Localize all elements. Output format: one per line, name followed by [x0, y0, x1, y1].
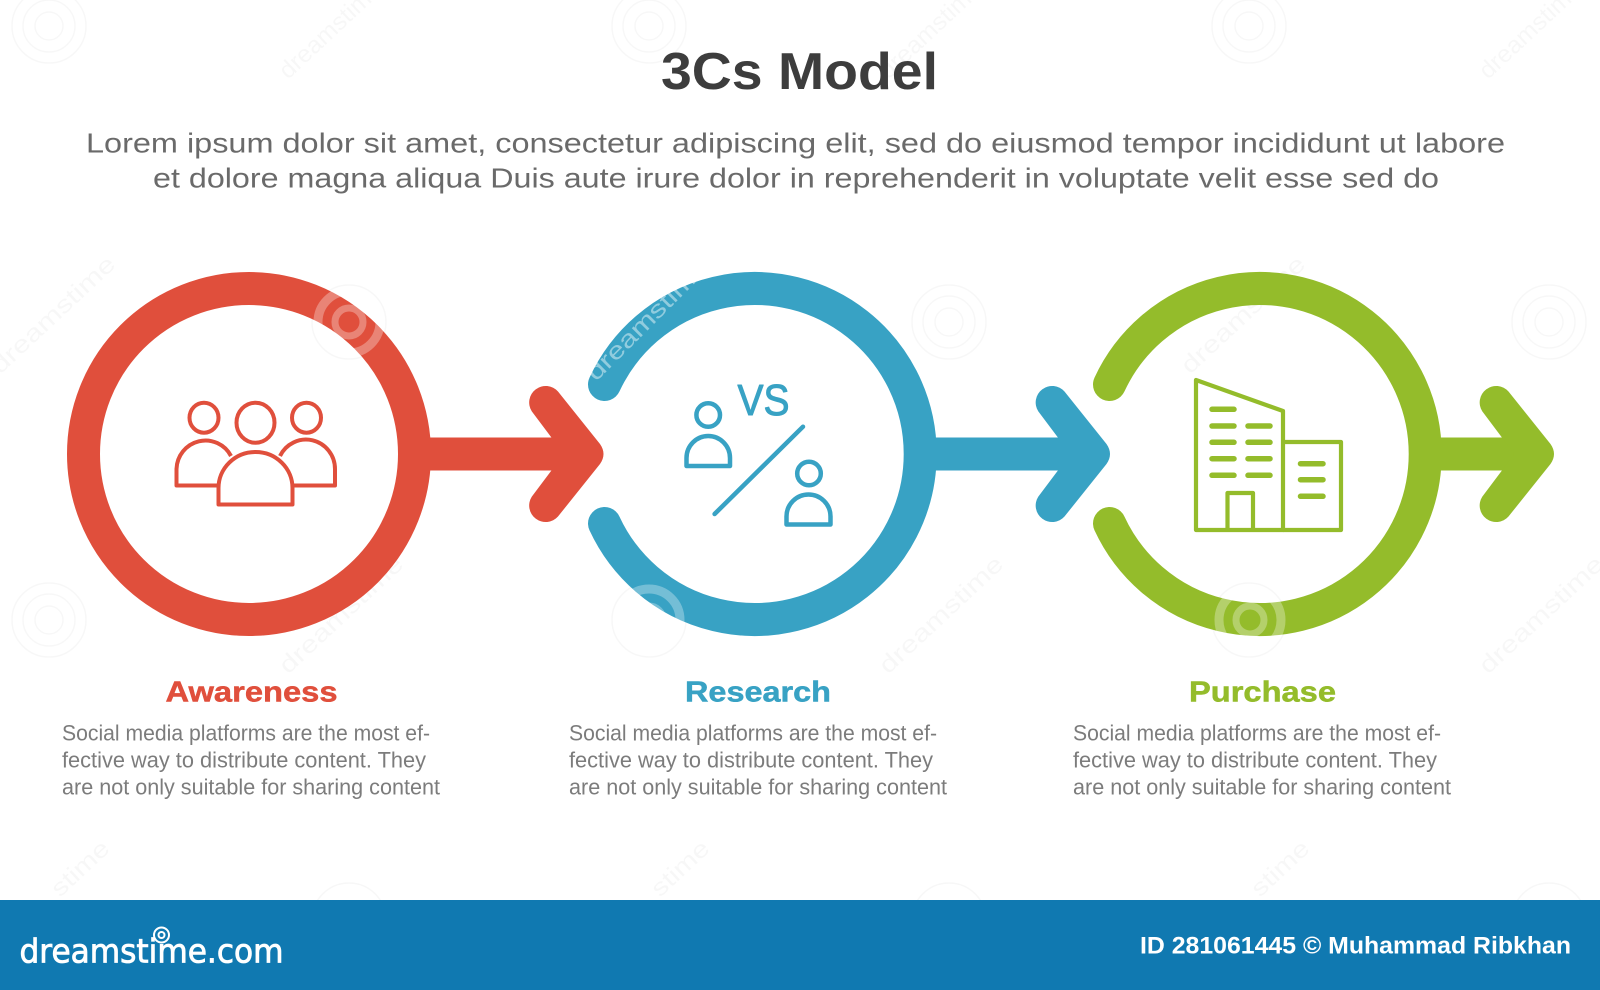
- text block: research: Social media platforms are the most ef-: [569, 721, 937, 746]
- text block: purchase: fective way to distribute content. They: [1073, 748, 1437, 773]
- ring: research: [604, 289, 920, 620]
- watermark layer: dreamstime: [1176, 251, 1311, 379]
- text block: awareness: Social media platforms are the most ef-: [62, 721, 430, 746]
- ring: awareness: [84, 288, 414, 620]
- arrow: awareness to research: [425, 386, 604, 522]
- subtitle: Lorem ipsum dolor sit amet, consectetur adipiscing elit, sed do eiusmod tempor incididunt ut labore: [86, 128, 1505, 158]
- text block: purchase: Social media platforms are the most ef-: [1073, 721, 1441, 746]
- watermark layer: stime: [646, 835, 715, 902]
- watermark layer: dreamstime: [274, 551, 409, 679]
- subtitle: et dolore magna aliqua Duis aute irure dolor in reprehenderit in voluptate velit esse sed do: [153, 162, 1439, 194]
- footer bar: [0, 900, 1600, 990]
- text block: awareness: fective way to distribute content. They: [62, 748, 426, 773]
- column: awareness: [62, 676, 440, 800]
- text block: research: are not only suitable for sharing content: [569, 775, 947, 800]
- step 1: awareness circle with arrow: [84, 288, 604, 620]
- text block: research: [569, 721, 947, 800]
- subtitle: [86, 128, 1505, 194]
- watermark overlay on rings: [318, 254, 1281, 651]
- watermark layer: stime: [1246, 835, 1315, 902]
- heading: awareness: Awareness: [166, 676, 338, 708]
- icon: group of people: [176, 403, 335, 504]
- column: research: [569, 676, 947, 800]
- footer credit: ID 281061445 © Muhammad Ribkhan: [1140, 932, 1571, 960]
- text block: research: fective way to distribute content. They: [569, 748, 933, 773]
- step 3: purchase circle with arrow: [1110, 289, 1554, 620]
- icon: person versus person: VS: [738, 376, 790, 425]
- text block: awareness: are not only suitable for sharing content: [62, 775, 440, 800]
- step 2: research circle with arrow: [604, 289, 1110, 620]
- watermark layer: dreamstime: [1474, 551, 1600, 679]
- column: purchase: [1073, 676, 1451, 800]
- arrow: purchase outward: [1438, 386, 1554, 522]
- watermark layer: dreamstime: [874, 551, 1009, 679]
- watermark layer: stime: [46, 835, 115, 902]
- text block: awareness: [62, 721, 440, 800]
- icon: logo swirl: [154, 928, 169, 942]
- watermark overlay on rings: dreamstime: [581, 254, 713, 386]
- title: 3Cs Model: [661, 43, 938, 101]
- text block: purchase: [1073, 721, 1451, 800]
- heading: research: Research: [685, 676, 831, 708]
- icon: person versus person: [686, 376, 830, 524]
- icon: office buildings: [1196, 380, 1341, 530]
- ring: purchase: [1110, 289, 1425, 620]
- heading: purchase: Purchase: [1189, 676, 1336, 708]
- text block: purchase: are not only suitable for sharing content: [1073, 775, 1451, 800]
- footer logo: dreamstime.com: [20, 932, 284, 970]
- arrow: research to purchase: [932, 386, 1110, 522]
